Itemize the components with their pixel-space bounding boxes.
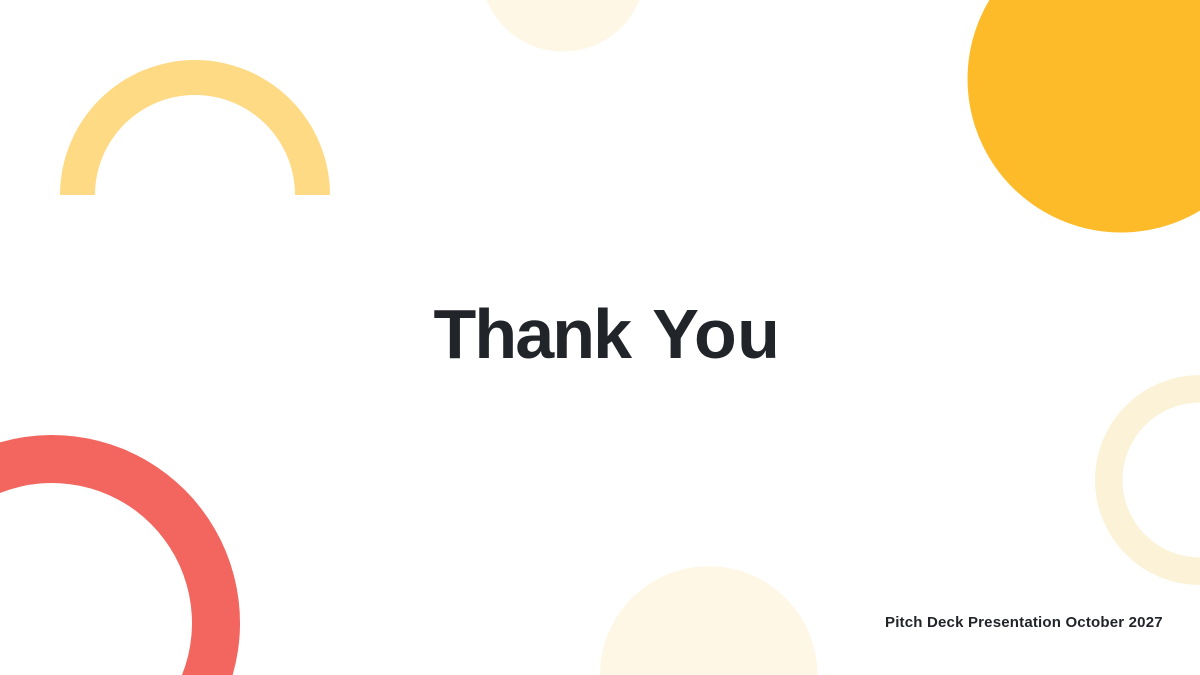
footer caption: Pitch Deck Presentation October 2027 <box>885 614 1163 631</box>
shape: pale ring right <box>1095 375 1200 585</box>
shape: yellow arch top left <box>60 60 330 195</box>
shape: large amber circle top right <box>968 0 1200 232</box>
shape: pale circle bottom centre <box>600 566 818 675</box>
shape: pale circle top centre <box>486 0 640 52</box>
title: Thank You <box>434 295 780 373</box>
shape: red ring bottom left <box>0 435 240 675</box>
